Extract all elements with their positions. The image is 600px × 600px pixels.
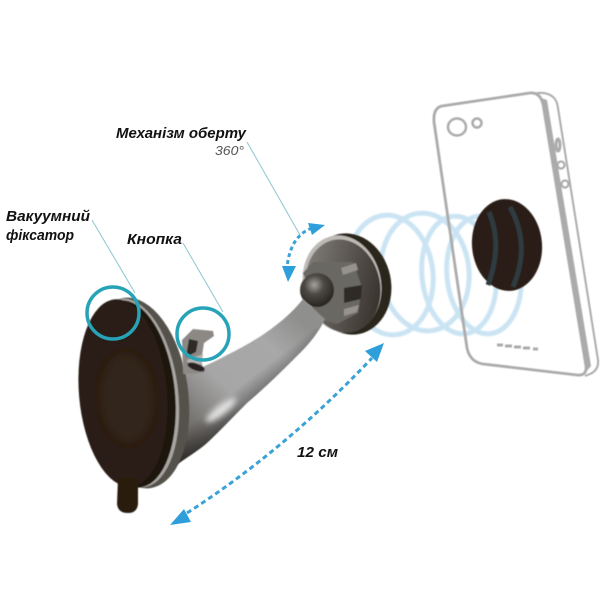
callout: button circle [177, 308, 229, 360]
leader lines [92, 142, 300, 312]
callout: vacuum fixer circle [87, 287, 139, 339]
suction mount arm [172, 299, 325, 468]
suction cup [71, 291, 201, 513]
label: rotation mechanism: Механізм оберту [116, 125, 247, 142]
magnetic plate on phone [468, 196, 546, 294]
rings seen through plate [488, 207, 521, 287]
release button clip [182, 329, 214, 374]
cup dark face [71, 296, 175, 490]
length arrow 12 cm [170, 343, 384, 525]
cup light edge [75, 293, 189, 493]
label: button: Кнопка [127, 231, 182, 248]
phone side edge [537, 93, 598, 376]
phone front outline [434, 93, 586, 375]
cup inner ellipse [106, 360, 148, 436]
head light rim [294, 228, 390, 340]
cup outer rim [73, 291, 201, 495]
phone edge band [541, 98, 591, 372]
rotation arrow [282, 223, 325, 282]
collar ribs [344, 285, 362, 303]
head back disc [297, 225, 401, 343]
phone speaker dots [497, 345, 538, 349]
label: 360 degrees: 360° [215, 143, 244, 158]
phone illustration [434, 93, 598, 376]
ball joint [300, 273, 334, 307]
label: vacuum fixer: Вакуумний [6, 208, 90, 225]
knurled collar [303, 262, 362, 324]
phone side buttons [556, 139, 568, 188]
arm highlight [203, 394, 239, 426]
label: vacuum fixer: фіксатор [6, 227, 74, 244]
magnetic wave rings [341, 209, 527, 339]
magnetic head [294, 225, 401, 343]
phone flash [472, 118, 482, 128]
phone camera [448, 118, 466, 136]
label: length: 12 см [297, 444, 338, 461]
cup pull tab [117, 478, 138, 513]
